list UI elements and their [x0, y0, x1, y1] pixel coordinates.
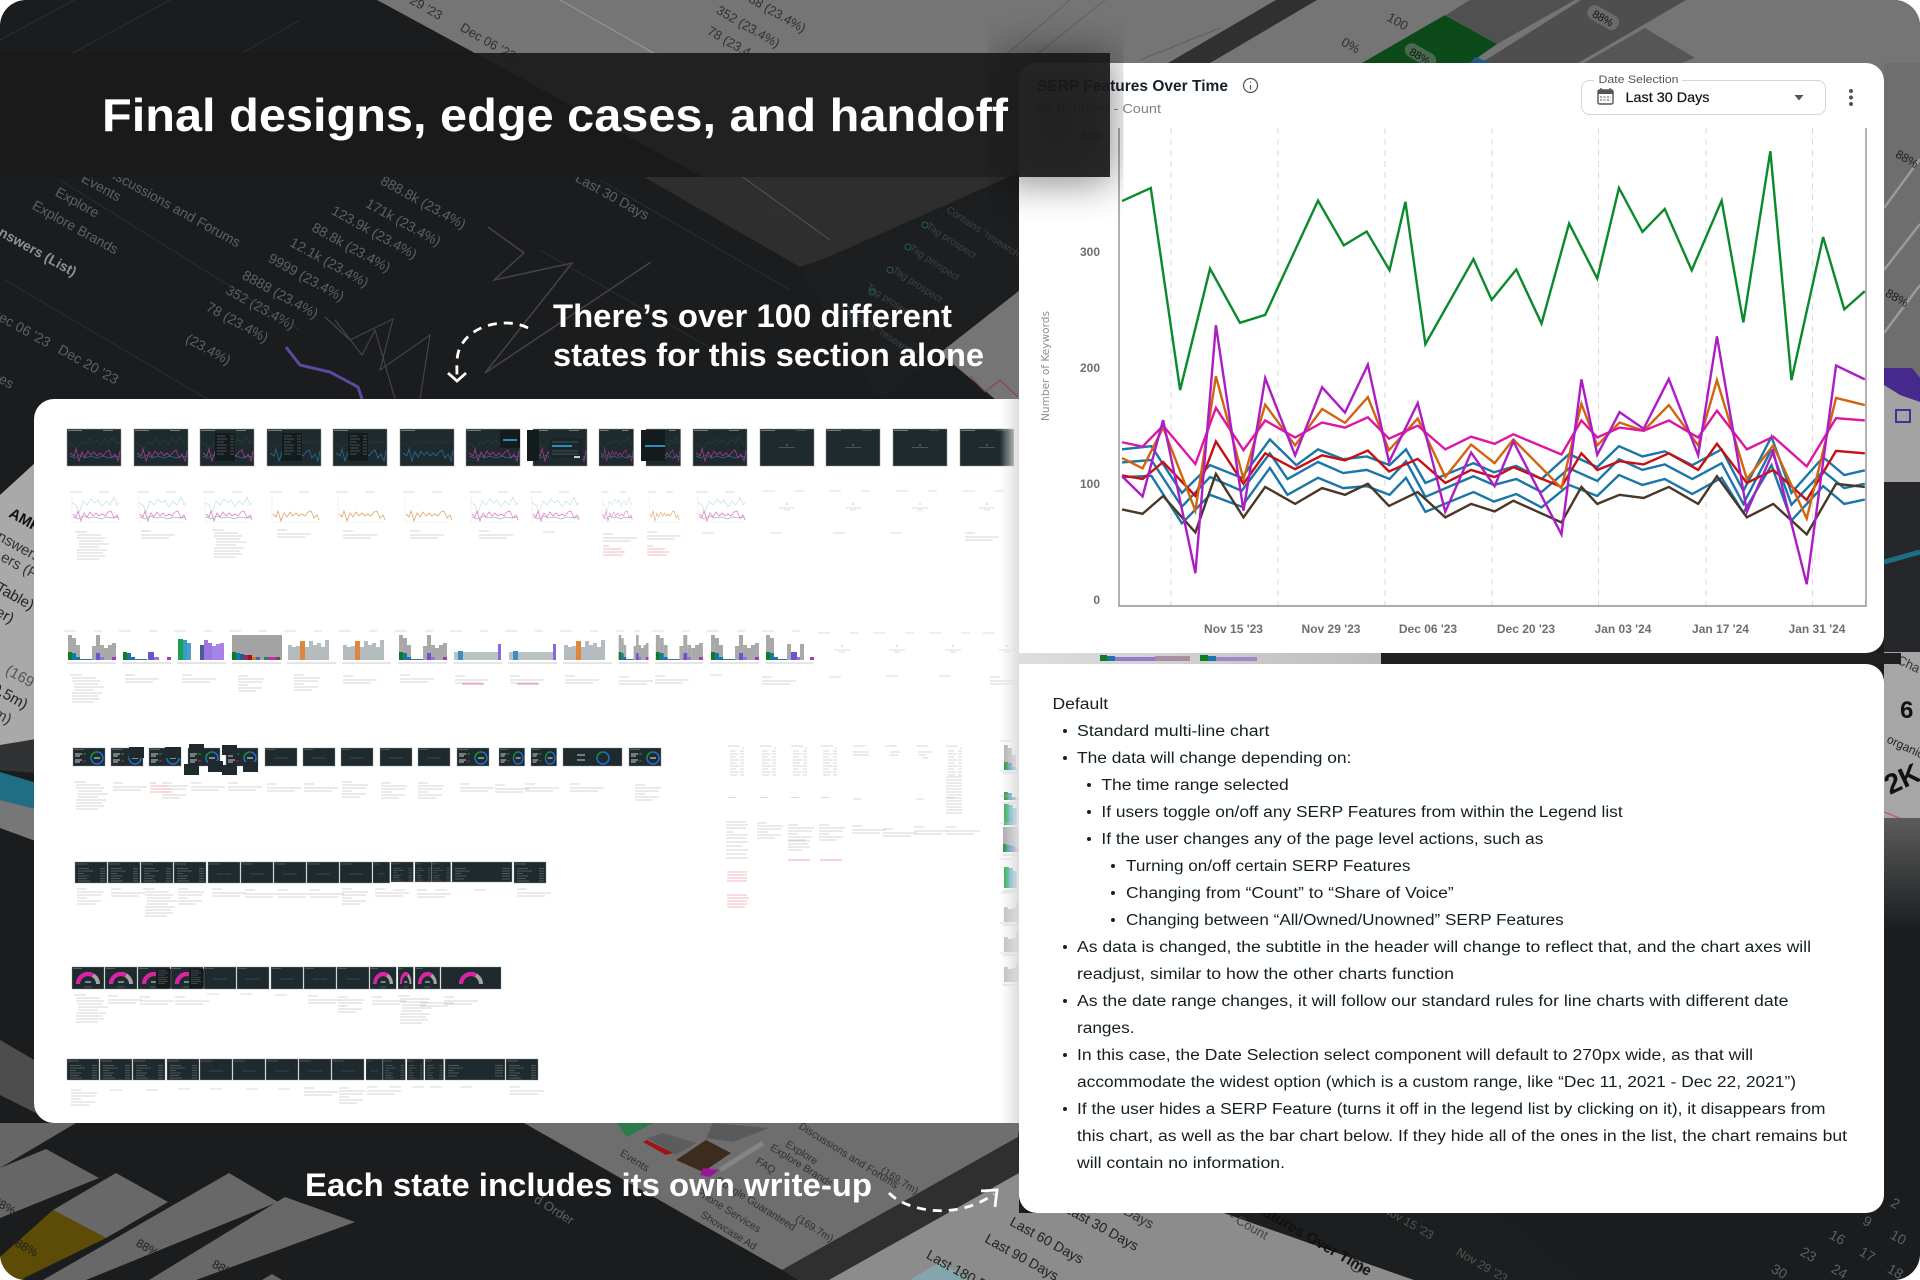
background: dark screen text: Dec 20 '23 [56, 341, 122, 387]
background: bottom middle legend screen: d Order [532, 1192, 577, 1228]
y axis labels [1080, 248, 1100, 604]
background: bottom middle legend screen: FAQ [753, 1155, 778, 1177]
title bar shadow [1000, 53, 1112, 183]
background: bottom right date menu screen: 16 [1827, 1226, 1848, 1248]
background: bottom middle legend screen [524, 1120, 1020, 1280]
write-up bullet list: readjust, similar to how the other charts function [1077, 966, 1454, 983]
background: bottom right date menu screen: 17 [1857, 1243, 1878, 1265]
x axis labels: Nov 29 '23 [1302, 622, 1361, 636]
background: left edge light screen: (169 [3, 662, 37, 691]
background: right edge screens: 6 [1900, 697, 1913, 724]
row 3: bar chart states with notes [64, 631, 1024, 702]
chart subtitle: All features - Count [1037, 101, 1161, 116]
background: dark screen text [0, 0, 1025, 430]
panel: SERP Features line chart [1019, 63, 1884, 653]
background: bottom right date menu screen: 2 [1888, 1194, 1903, 1212]
background: bottom middle legend screen: (169.7m) [878, 1165, 920, 1197]
row 4 side: light table states with notes [726, 746, 980, 907]
background: dark screen text: Explore [53, 184, 102, 221]
x axis labels: Dec 06 '23 [1399, 622, 1457, 636]
title bar [0, 53, 1110, 177]
panel: overview of all states [34, 399, 1074, 1123]
background: bottom middle legend screen: Showcase Ad [698, 1209, 759, 1253]
row 4 far right: stacked bar variants [1000, 740, 1018, 986]
background: bottom right date menu screen: Features Over Time [1245, 1195, 1375, 1280]
x axis labels: Jan 03 '24 [1595, 622, 1652, 636]
write-up bullet list: If the user hides a SERP Feature (turns it off in the legend list by clicking on it), it disappears from [1077, 1101, 1826, 1118]
background: left edge light screen: AMP [6, 505, 43, 536]
background: top light screen: 0% [1339, 34, 1363, 57]
date selection control: Date Selection [1598, 74, 1678, 86]
background: dark screen text: Contains "research" [839, 303, 920, 360]
write-up bullet list: Changing from “Count” to “Share of Voice” [1126, 885, 1454, 902]
background: dark screen text: Tag prospect [890, 265, 944, 306]
y axis labels: 200 [1080, 361, 1100, 375]
background: bottom right date menu screen [829, 1173, 1909, 1280]
write-up bullet list: The time range selected [1101, 777, 1289, 794]
background: bottom right date menu screen: 10 [1888, 1226, 1909, 1248]
write-up bullet list: accommodate the widest option (which is a custom range, like “Dec 11, 2021 - Dec 22, 2021”) [1077, 1074, 1796, 1091]
date selection control [1582, 74, 1826, 114]
background: bottom-left bar tiles [0, 1040, 355, 1280]
background: dark screen text: 123.9k (23.4%) [329, 202, 420, 262]
x axis labels: Nov 15 '23 [1204, 622, 1263, 636]
background: right edge screens: 88% [1883, 286, 1911, 310]
background: percentage pills: 88% [1590, 8, 1615, 30]
arrow: to write-up panel [889, 1190, 997, 1211]
x axis labels: Jan 17 '24 [1692, 622, 1749, 636]
state thumbnail strip peeking between the cards [1019, 653, 1381, 664]
row 7: dark table states with notes [67, 1059, 544, 1105]
write-up bullet list [1063, 723, 1848, 1172]
background: bottom right date menu screen: Nov 15 '23 [1380, 1202, 1436, 1242]
background: dark screen text: Last 30 Days [573, 169, 652, 223]
background: bottom right date menu screen: Last 60 Days [1007, 1213, 1087, 1267]
background: bottom middle legend screen: (169.7m) [793, 1213, 835, 1245]
background: right edge screens [1884, 150, 1920, 918]
write-up bullet list: As data is changed, the subtitle in the header will change to reflect that, and the chart axes will [1077, 939, 1811, 956]
background: bottom middle legend screen: Explore Brands [768, 1142, 835, 1190]
background: bottom-left bar tiles: 88% [134, 1236, 162, 1260]
background: dark screen text: 171k (23.4%) [363, 195, 444, 249]
title: Final designs, edge cases, and handoff [102, 89, 1009, 141]
background: dark screen text: Contains "research" [944, 205, 1025, 262]
background: dark screen text: 8888 (23.4%) [240, 267, 321, 321]
background: dark screen text: Events [79, 170, 124, 205]
background: top light screen: 78 (23.4 [705, 23, 754, 60]
write-up bullet list: If users toggle on/off any SERP Features from within the Legend list [1101, 804, 1623, 821]
write-up heading: Default [1052, 696, 1109, 713]
background: bottom right date menu screen: 23 [1798, 1243, 1819, 1265]
y axis labels: 300 [1080, 245, 1100, 259]
write-up bullet list: Changing between “All/Owned/Unowned” SERP Features [1126, 912, 1564, 929]
background: top light screen: Jan 31 '24 [765, 198, 824, 241]
y axis labels: 100 [1080, 477, 1100, 491]
background: dark screen text: 352 (23.4%) [223, 282, 298, 333]
x axis labels: Jan 31 '24 [1789, 622, 1846, 636]
background: dark screen text: Tag prospect [924, 221, 978, 262]
row 4: dark donut states with notes [73, 744, 661, 809]
background: percentage pills [1404, 5, 1620, 63]
write-up bullet list: Standard multi-line chart [1077, 723, 1270, 740]
write-up bullet list: If the user changes any of the page level actions, such as [1101, 831, 1544, 848]
row 5: dark table states with notes [75, 862, 551, 916]
background: top light screen [377, 0, 1920, 420]
background: bottom middle legend screen: Google Guaranteed [713, 1174, 798, 1233]
write-up bullet list: this chart, as well as the bar chart below. If they hide all of the ones in the list, the chart remains but [1077, 1128, 1848, 1145]
background: dark screen text: Explore Brands [30, 197, 121, 257]
background: dark screen text: 888.8k (23.4%) [378, 172, 469, 232]
y axis labels: 400 [1080, 129, 1100, 143]
write-up bullet list: will contain no information. [1076, 1155, 1285, 1172]
background: bottom middle legend screen: Discussions and Forums [797, 1120, 900, 1191]
callout: write-up: Each state includes its own write-up [305, 1167, 872, 1203]
background: top light screen: Dec 06 '23 [458, 20, 519, 63]
background: bottom middle legend screen: Explore [783, 1138, 820, 1167]
background: dark screen text: Tag prospect [907, 243, 961, 284]
chart title: SERP Features Over Time [1037, 78, 1228, 95]
background: top light screen: 100 [1385, 10, 1411, 33]
icon: calendar [1598, 88, 1613, 104]
background: dark screen text: 88.8k (23.4%) [309, 219, 393, 275]
background: dark screen text: 12.1k (23.4%) [287, 234, 371, 290]
write-up bullet list: Turning on/off certain SERP Features [1126, 858, 1411, 875]
background: dark screen text: Discussions and Forums [102, 162, 243, 250]
background: bottom middle legend screen: Phone Services [694, 1186, 763, 1235]
x axis labels: Dec 20 '23 [1497, 622, 1555, 636]
row 2: light line chart states with notes [70, 491, 1004, 559]
background: bottom middle legend screen: Events [618, 1147, 651, 1174]
panel: write-up for default state [1019, 664, 1884, 1213]
background: percentage pills: 88% [1407, 46, 1432, 68]
background: dark screen text: 9999 (23.4%) [266, 250, 347, 304]
row 6: pink gauge states with notes [72, 967, 501, 1023]
callout: number of states: states for this section alone [553, 337, 984, 373]
row 1: dark line chart states [67, 429, 1014, 466]
background: dark screen text: (23.4%) [183, 330, 234, 368]
x axis labels [1204, 624, 1846, 633]
y axis labels: 0 [1093, 593, 1100, 607]
background: top light screen: 352 (23.4%) [714, 2, 783, 51]
line chart series [1122, 151, 1865, 584]
background: bottom-left bar tiles: 88% [13, 1236, 41, 1260]
background: dark screen text: 78 (23.4%) [204, 299, 271, 346]
date selection control: Last 30 Days [1626, 89, 1710, 105]
background: bottom right date menu screen: Last 30 Days [1062, 1200, 1142, 1254]
write-up bullet list: ranges. [1077, 1020, 1134, 1037]
gridlines and axes [1119, 128, 1866, 606]
background: dark screen text: Tag prospect Q... [864, 282, 934, 333]
icon: info [1244, 78, 1258, 92]
arrow: to states overview [448, 323, 528, 381]
write-up bullet list: As the date range changes, it will follow our standard rules for line charts with different date [1077, 993, 1788, 1010]
background: bottom right date menu screen: Days [1121, 1202, 1157, 1232]
write-up bullet list: In this case, the Date Selection select component will default to 270px wide, as that will [1077, 1047, 1753, 1064]
background: bottom right date menu screen: - Count [1227, 1208, 1271, 1243]
background: left edge light screen [0, 464, 34, 840]
icon: kebab menu [1849, 89, 1853, 106]
callout: number of states [553, 304, 983, 366]
background: bottom right date menu screen: 9 [1860, 1212, 1875, 1230]
write-up bullet list: The data will change depending on: [1077, 750, 1351, 767]
y axis title: Number of Keywords [1040, 311, 1052, 421]
callout: number of states: There’s over 100 different [553, 298, 952, 334]
